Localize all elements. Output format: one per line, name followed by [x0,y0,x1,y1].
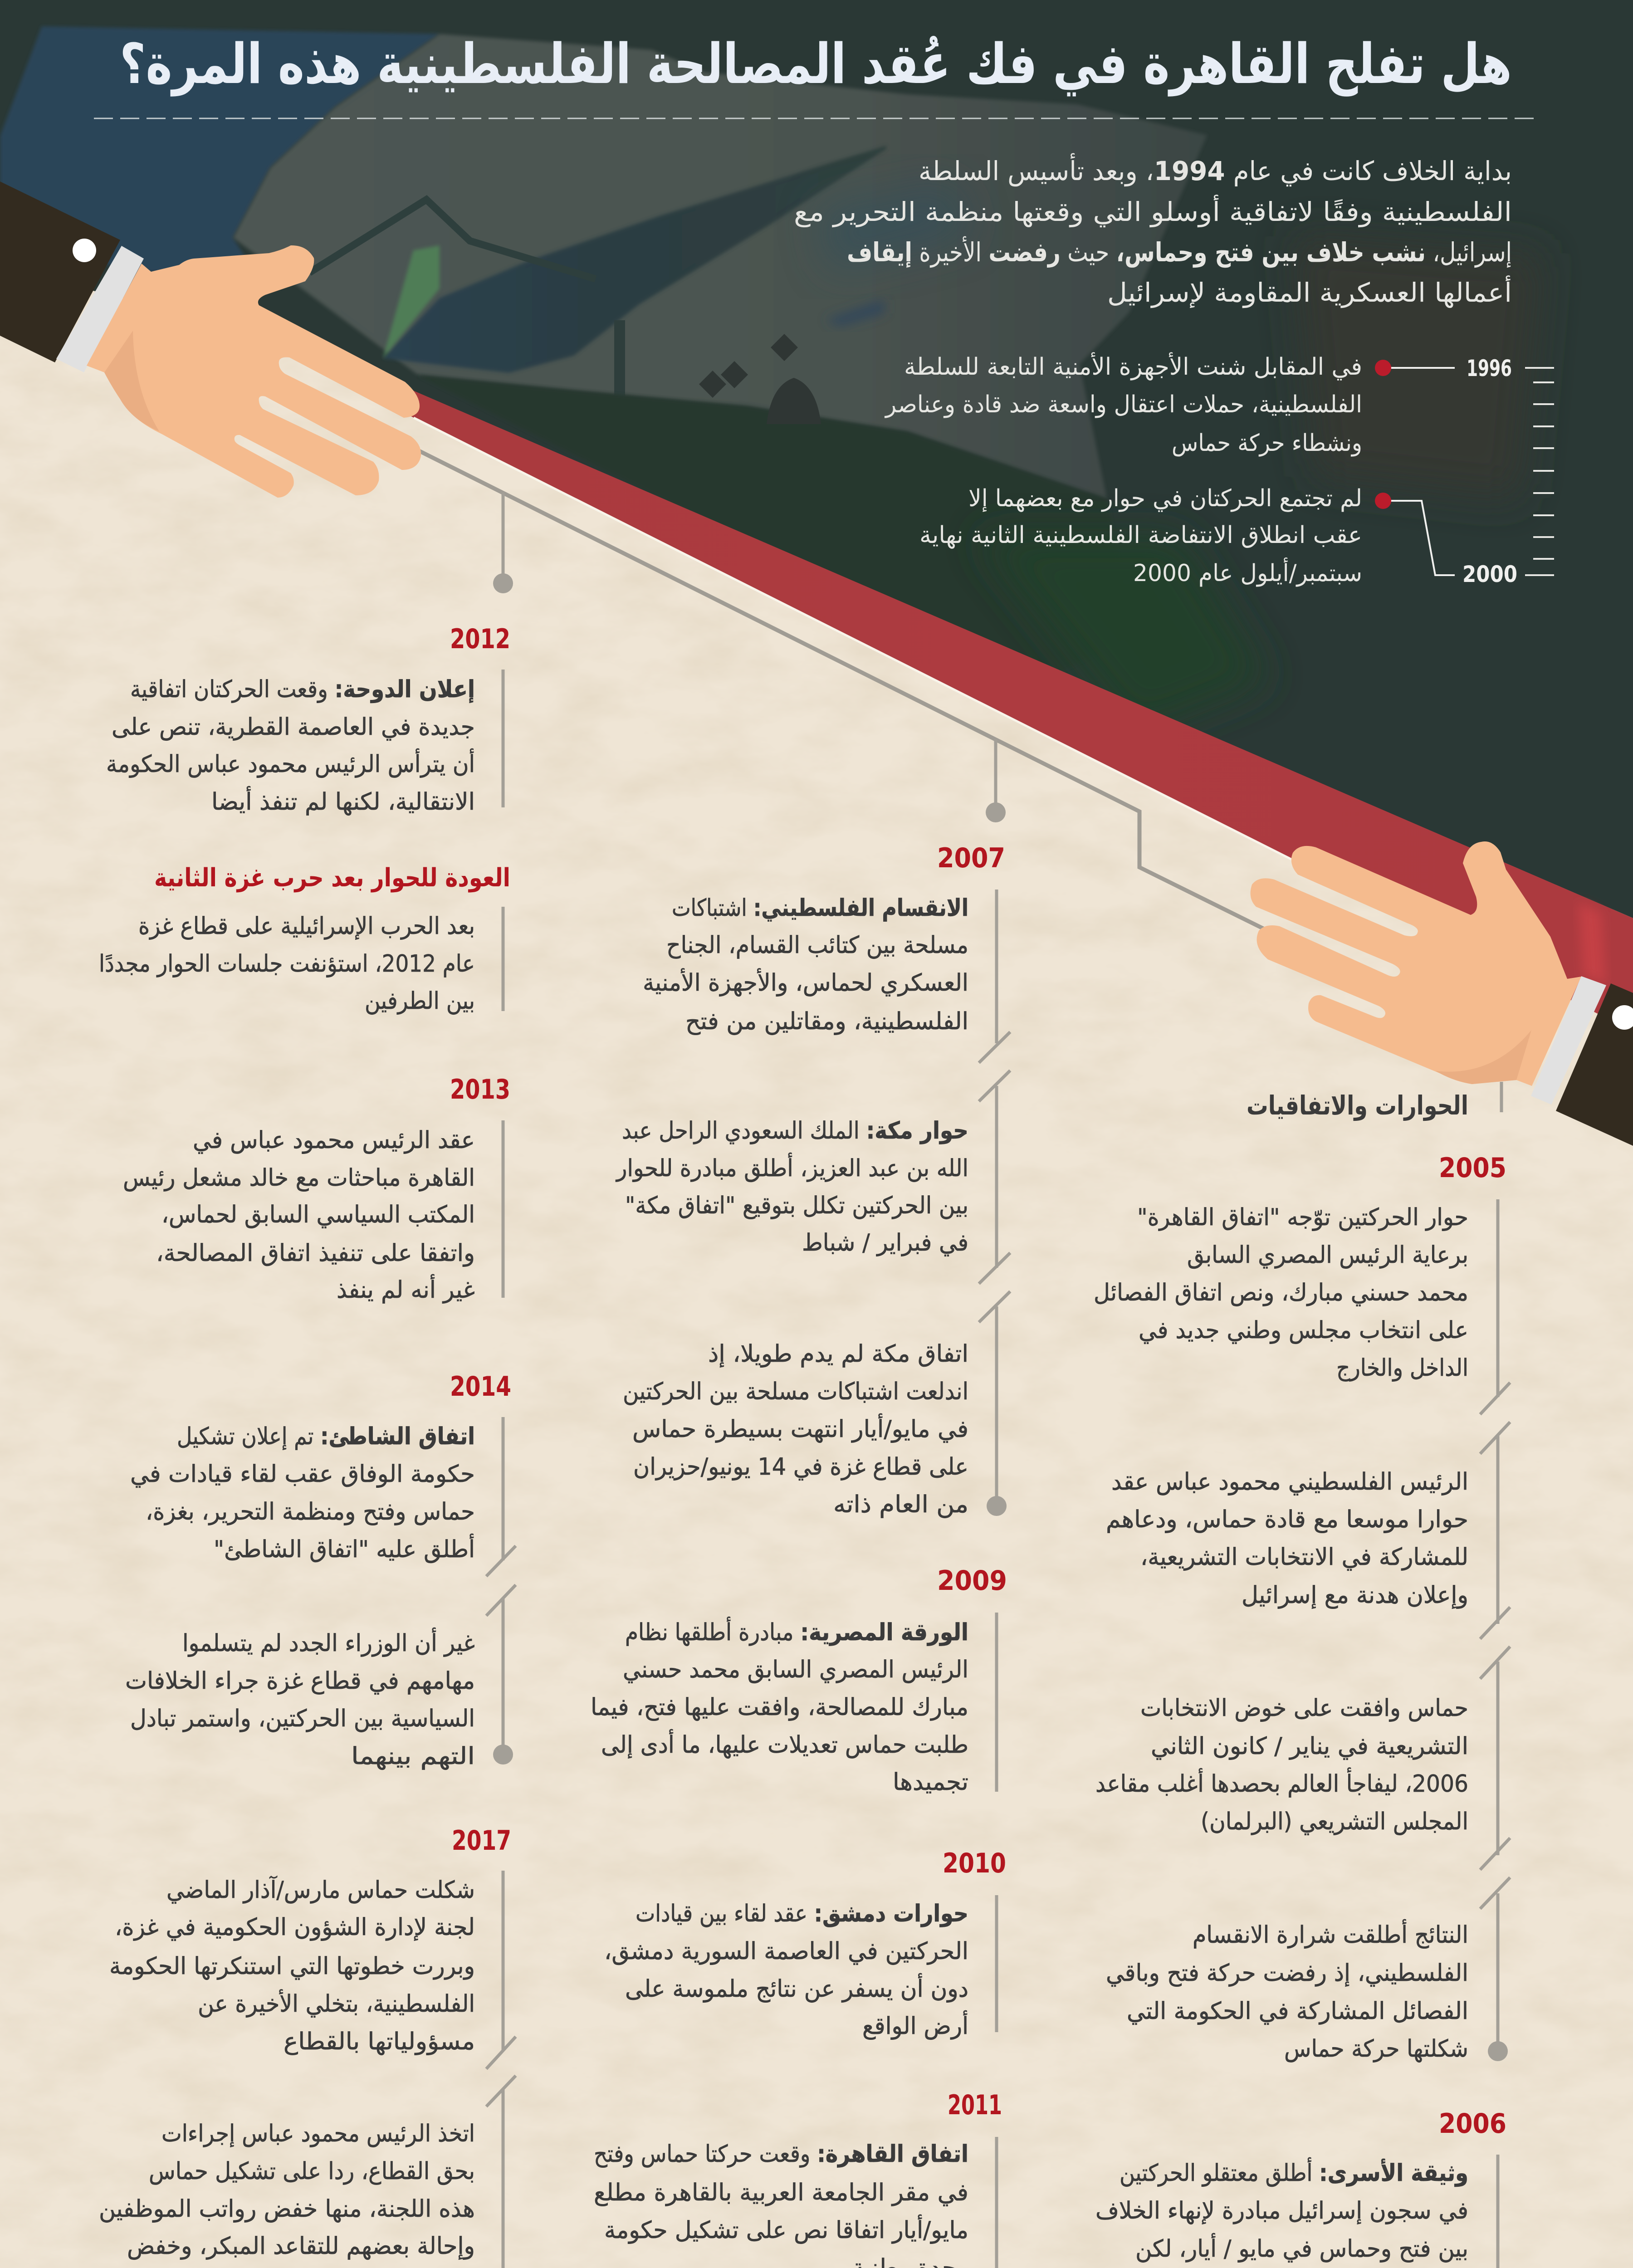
text: Hamas elections: المجلس التشريعي (البرلمان) [1201,1808,1468,1835]
heading: dialogues and agreements: الحوارات والاتفاقيات [1247,1090,1468,1121]
text: Palestinian split: العسكري لحماس، والأجهزة الأمنية [643,968,968,997]
text: Damascus talks: دون أن يسفر عن نتائج ملموسة على [625,1973,968,2003]
year 1996: 1996 [1467,355,1512,381]
text: results sparked split [1106,1919,1468,2063]
text: Damascus talks: الحركتين في العاصمة السورية دمشق، [604,1938,968,1965]
year 2017: 2017 [452,1825,511,1857]
text: Doha declaration: الانتقالية، لكنها لم تنفذ أيضا [211,786,475,816]
year 2014: 2014 [450,1371,511,1403]
text: administrative committee [109,1875,475,2055]
text: 2000 event: لم تجتمع الحركتان في حوار مع بعضهما إلا [968,485,1362,512]
text: Damascus talks [604,1900,968,2040]
text: Abbas dialogue: الرئيس الفلسطيني محمود عباس عقد [1111,1468,1468,1496]
text: Palestinian split: الفلسطينية، ومقاتلين من فتح [685,1008,968,1035]
panel: left column 2013 [123,1074,510,1304]
text: Cairo talks: واتفقا على تنفيذ اتفاق المصالحة، [156,1240,475,1267]
text: Egyptian paper [591,1617,968,1796]
text: Palestinian split [643,894,968,1035]
icon: right hand shadow [1436,1030,1531,1084]
text: Palestinian split: الانقسام الفلسطيني: اشتباكات [672,894,968,922]
timeline ruler 1996-2000 [1375,355,1554,587]
dot [1488,2041,1508,2061]
text: administrative committee: الفلسطينية، بتخلي الأخيرة عن [198,1989,475,2018]
text: 1996 event [884,352,1362,457]
text: Mecca agreement collapse: على قطاع غزة في 14 يونيو/حزيران [633,1453,968,1481]
intro text block: أعمالها العسكرية المقاومة لإسرائيل [1107,275,1512,308]
intro text block: إسرائيل، نشب خلاف بين فتح وحماس، حيث رفضت الأخيرة إيقاف [847,236,1512,268]
panel: middle column 2007 [615,842,1010,1518]
year 2011: 2011 [948,2089,1002,2121]
red heading: العودة للحوار بعد حرب غزة الثانية [154,863,510,893]
text: administrative committee: لجنة لإدارة الشؤون الحكومية في غزة، [115,1914,475,1941]
text: Egyptian paper: الرئيس المصري السابق محمد حسني [623,1656,968,1683]
text: Cairo agreement 2005: حوار الحركتين توّجه "اتفاق القاهرة" [1137,1204,1468,1231]
text: prisoners document: في سجون إسرائيل مبادرة لإنهاء الخلاف [1095,2197,1468,2224]
text: Mecca agreement collapse [623,1340,968,1518]
text: Beach agreement: حكومة الوفاق عقب لقاء قيادات في [130,1461,475,1488]
text: Cairo agreement 2005: برعاية الرئيس المصري السابق [1187,1242,1468,1269]
background: dark flag photo area [0,0,1633,918]
text: prisoners document: وثيقة الأسرى: أطلق معتقلو الحركتين [1120,2157,1468,2187]
year 2009: 2009 [937,1565,1007,1597]
text: Cairo agreement 2005: على انتخاب مجلس وطني جديد في [1139,1317,1468,1344]
text: Cairo talks: القاهرة مباحثات مع خالد مشعل رئيس [123,1164,475,1192]
text: Cairo talks: عقد الرئيس محمود عباس في [193,1127,475,1154]
dot [987,1496,1007,1516]
text: Mecca agreement collapse: اتفاق مكة لم يدم طويلا، إذ [708,1340,968,1368]
panel: left column 2017 [99,1825,516,2268]
text: Hamas elections: حماس وافقت على خوض الانتخابات [1140,1695,1468,1722]
text: Mecca dialogue: حوار مكة: الملك السعودي الراحل عبد [622,1117,968,1144]
text: administrative committee: وبررت خطوتها التي استنكرتها الحكومة [109,1953,475,1980]
text: Mecca agreement collapse: في مايو/أيار انتهت بسيطرة حماس [632,1413,968,1443]
icon: right cuff button [1612,1005,1633,1030]
text: ministers did not take over: مهامهم في قطاع غزة جراء الخلافات [125,1667,475,1695]
right hand with cuff and sleeve [1251,841,1633,1146]
text: Egyptian paper: تجميدها [893,1769,968,1796]
text: Egyptian paper: طلبت حماس تعديلات عليها، ما أدى إلى [601,1729,968,1759]
icon: right hand [1251,841,1581,1086]
intro text block: الفلسطينية وفقًا لاتفاقية أوسلو التي وقعتها منظمة التحرير مع [794,195,1512,228]
red dot 1996 [1375,360,1391,376]
icon: left cuff [56,246,144,372]
text: talks resumed [99,913,475,1015]
year 2000: 2000 [1462,561,1517,587]
left hand with cuff and sleeve [0,181,421,498]
year 2012: 2012 [450,623,510,655]
text: 1996 event: في المقابل شنت الأجهزة الأمنية التابعة للسلطة [904,352,1362,381]
text: 2000 event: عقب انطلاق الانتفاضة الفلسطينية الثانية نهاية [919,522,1362,549]
text: Doha declaration: أن يترأس الرئيس محمود عباس الحكومة [106,748,475,778]
text: Hamas elections: 2006، ليفاجأ العالم بحصدها أغلب مقاعد [1095,1767,1468,1798]
text: 2000 event: سبتمبر/أيلول عام 2000 [1133,557,1362,587]
text: talks resumed: بعد الحرب الإسرائيلية على قطاع غزة [138,913,475,940]
text: Abbas dialogue: حوارا موسعا مع قادة حماس، ودعاهم [1106,1506,1468,1533]
connector: diagonal timeline line with branches [408,445,1501,1112]
year 2005: 2005 [1439,1152,1506,1184]
text: Cairo talks [123,1127,475,1304]
panel: return to dialogue after second Gaza war [99,863,510,1015]
text: Cairo agreement 2011 [594,2141,968,2268]
text: Egyptian paper: مبارك للمصالحة، وافقت عليها فتح، فيما [591,1694,968,1721]
text: 1996 event: الفلسطينية، حملات اعتقال واسعة ضد قادة وعناصر [884,391,1362,418]
text: administrative committee: شكلت حماس مارس/آذار الماضي [166,1875,475,1904]
year 2006: 2006 [1439,2108,1506,2140]
icon: right cuff [1531,976,1606,1105]
red dot 2000 [1375,493,1391,509]
diagonal red band [181,290,1633,1031]
text: prisoners document [1095,2157,1468,2268]
icon: left cuff button [73,239,96,262]
text: Abbas dialogue: للمشاركة في الانتخابات التشريعية، [1140,1544,1468,1571]
text: Hamas elections: التشريعية في يناير / كانون الثاني [1151,1733,1468,1760]
text: Beach agreement [130,1423,475,1563]
text: Beach agreement: حماس وفتح ومنظمة التحرير، بغزة، [146,1498,475,1525]
icon: left hand shadow [104,331,159,431]
text: Mecca dialogue: في فبراير / شباط [802,1229,968,1256]
dot [493,1745,513,1765]
text: Cairo agreement 2005 [1094,1204,1468,1382]
year 2013: 2013 [450,1074,510,1105]
text: results sparked split: الفصائل المشاركة في الحكومة التي [1127,1998,1468,2025]
text: Mecca agreement collapse: من العام ذاته [833,1491,968,1518]
panel: right column 2005 [1094,1152,1510,2063]
panel: middle column 2010 [604,1848,1006,2040]
text: Cairo agreement 2011: مايو/أيار اتفاقا نص على تشكيل حكومة [604,2214,968,2244]
text: Abbas measures: بحق القطاع، ردا على تشكيل حماس [149,2158,475,2185]
text: Mecca dialogue [615,1117,968,1256]
text: Cairo talks: المكتب السياسي السابق لحماس، [161,1201,475,1228]
text: Cairo agreement 2005: محمد حسني مبارك، ونص اتفاق الفصائل [1094,1279,1468,1306]
text: ministers did not take over [125,1628,475,1770]
text: Cairo agreement 2011: في مقر الجامعة العربية بالقاهرة مطلع [594,2179,968,2206]
text: talks resumed: بين الطرفين [365,987,475,1015]
text: Hamas elections [1095,1695,1468,1835]
text: Abbas measures: اتخذ الرئيس محمود عباس إجراءات [161,2120,475,2147]
text: Abbas dialogue: وإعلان هدنة مع إسرائيل [1242,1582,1468,1609]
text: ministers did not take over: السياسية بين الحركتين، واستمر تبادل [130,1705,475,1732]
panel: middle column 2011 [594,2089,1002,2268]
year 2007: 2007 [937,842,1005,874]
text: Doha declaration: إعلان الدوحة: وقعت الحركتان اتفاقية [130,676,475,703]
text: Cairo agreement 2011: اتفاق القاهرة: وقعت حركتا حماس وفتح [594,2141,968,2168]
text: prisoners document: بين فتح وحماس في مايو / أيار، لكن [1135,2233,1468,2263]
text: Beach agreement: اتفاق الشاطئ: تم إعلان تشكيل [177,1423,475,1450]
text: Abbas measures: هذه اللجنة، منها خفض رواتب الموظفين [99,2195,475,2223]
text: ministers did not take over: التهم بينهما [351,1743,475,1770]
year 2010: 2010 [943,1848,1006,1879]
icon: left sleeve [0,181,120,362]
panel: right column 2006 [1095,2108,1510,2268]
text: Mecca agreement collapse: اندلعت اشتباكات مسلحة بين الحركتين [623,1378,968,1405]
text: Abbas measures [99,2120,475,2268]
text: Egyptian paper: الورقة المصرية: مبادرة أطلقها نظام [625,1617,968,1646]
text: results sparked split: النتائج أطلقت شرارة الانقسام [1193,1919,1468,1949]
text: Doha declaration: جديدة في العاصمة القطرية، تنص على [112,714,475,741]
text: Cairo agreement 2005: الداخل والخارج [1336,1354,1468,1382]
text: 2000 event [919,485,1362,587]
text: Cairo talks: غير أنه لم ينفذ [337,1274,475,1304]
text: ministers did not take over: غير أن الوزراء الجدد لم يتسلموا [182,1628,475,1657]
intro text block: بداية الخلاف كانت في عام 1994، وبعد تأسيس السلطة [919,153,1512,187]
text: Beach agreement: أطلق عليه "اتفاق الشاطئ" [214,1534,475,1563]
text: Mecca dialogue: بين الحركتين تكلل بتوقيع "اتفاق مكة" [625,1192,968,1219]
intro text block [794,153,1512,308]
text: results sparked split: شكلتها حركة حماس [1284,2035,1468,2063]
panel: left column 2014 [125,1371,516,1770]
panel: middle column 2009 [591,1565,1007,1796]
panel: left column 2012 Doha [106,623,510,816]
text: Damascus talks: أرض الواقع [862,2010,968,2040]
text: Abbas measures: وإحالة بعضهم للتقاعد المبكر، وخفض [127,2233,475,2260]
text: Palestinian split: مسلحة بين كتائب القسام، الجناح [666,932,968,959]
text: Doha declaration [106,676,475,816]
text: talks resumed: عام 2012، استؤنفت جلسات الحوار مجددًا [99,950,475,978]
text: results sparked split: الفلسطيني، إذ رفضت حركة فتح وباقي [1106,1960,1468,1987]
text: Abbas dialogue [1106,1468,1468,1609]
icon: left hand [87,245,421,498]
text: administrative committee: مسؤولياتها بالقطاع [284,2028,475,2055]
text: 1996 event: ونشطاء حركة حماس [1172,430,1362,457]
text: Mecca dialogue: الله بن عبد العزيز، أطلق مبادرة للحوار [615,1153,968,1182]
icon: right sleeve [1556,983,1633,1146]
text: Damascus talks: حوارات دمشق: عقد لقاء بين قيادات [636,1900,968,1927]
